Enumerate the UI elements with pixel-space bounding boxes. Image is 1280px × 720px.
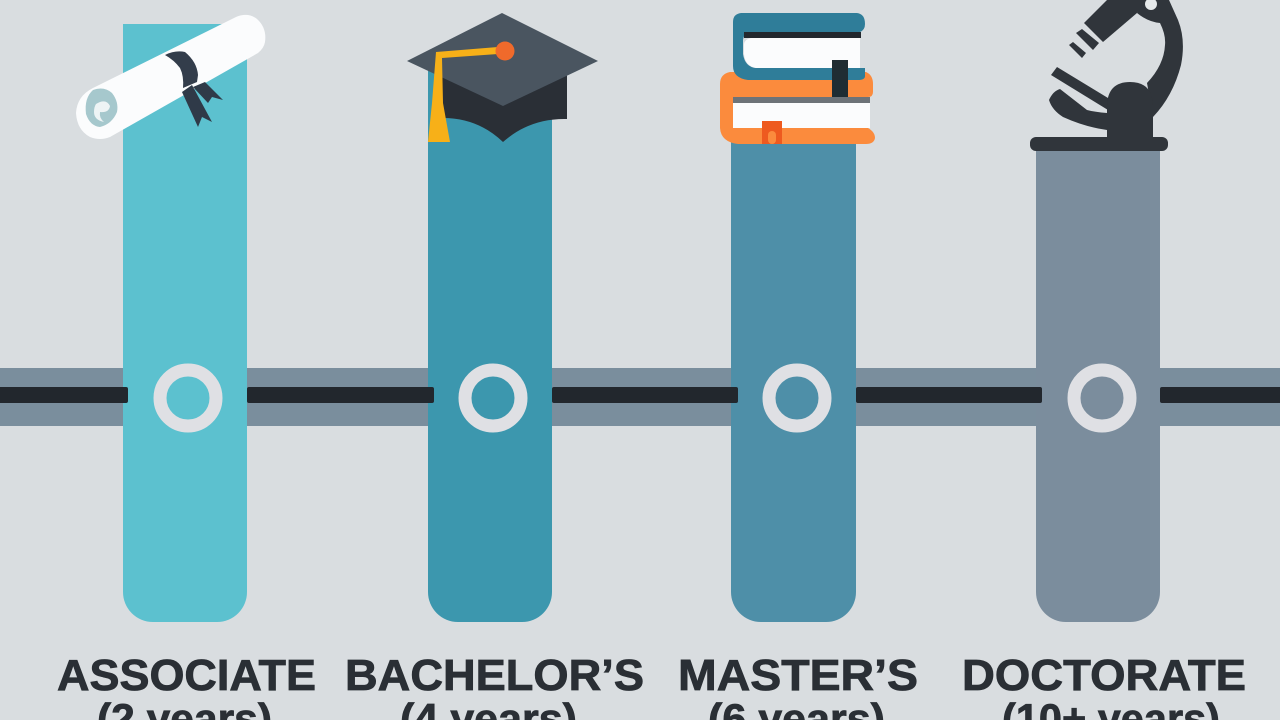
label: master's: MASTER’S: [678, 651, 918, 700]
doctorate timeline marker: [1074, 370, 1130, 426]
column: master's: [678, 13, 918, 720]
cap button: [496, 42, 514, 60]
bachelor's timeline marker: [465, 370, 521, 426]
microscope arm: [1137, 0, 1183, 117]
associate timeline marker: [160, 370, 216, 426]
doctorate bar: [1036, 145, 1160, 622]
label: associate: ASSOCIATE: [57, 651, 316, 700]
column: bachelor's: [345, 13, 644, 720]
label: master's: [678, 651, 918, 720]
column: doctorate: [962, 0, 1246, 720]
red bookmark: [762, 121, 782, 144]
master's bar: [731, 140, 856, 622]
label: bachelor's: [345, 651, 644, 720]
microscope pillar: [1107, 82, 1153, 137]
icon: graduation cap: [407, 13, 598, 142]
column: associate: [57, 15, 316, 720]
icon: microscope: [1030, 0, 1183, 151]
microscope knob: [1145, 0, 1157, 10]
microscope base: [1030, 137, 1168, 151]
label: doctorate: [962, 651, 1246, 720]
associate bar: [123, 24, 247, 622]
tassel: [428, 47, 498, 142]
label: associate: [57, 651, 316, 720]
master's timeline marker: [769, 370, 825, 426]
icon: diploma scroll: [76, 15, 265, 139]
timeline band: [0, 368, 1280, 426]
dark bookmark: [832, 60, 848, 97]
microscope stage: [1051, 67, 1108, 110]
microscope tube: [1084, 0, 1143, 42]
bottom book: [720, 72, 875, 144]
icon: stacked books: [720, 13, 875, 144]
label: bachelor's: BACHELOR’S: [345, 651, 644, 700]
bachelor's bar: [428, 70, 552, 622]
top book: [733, 13, 865, 80]
ribbon tails: [182, 85, 212, 127]
label: doctorate: DOCTORATE: [962, 651, 1246, 700]
timeline dark line segments: [0, 387, 1280, 403]
ribbon band: [165, 51, 198, 88]
